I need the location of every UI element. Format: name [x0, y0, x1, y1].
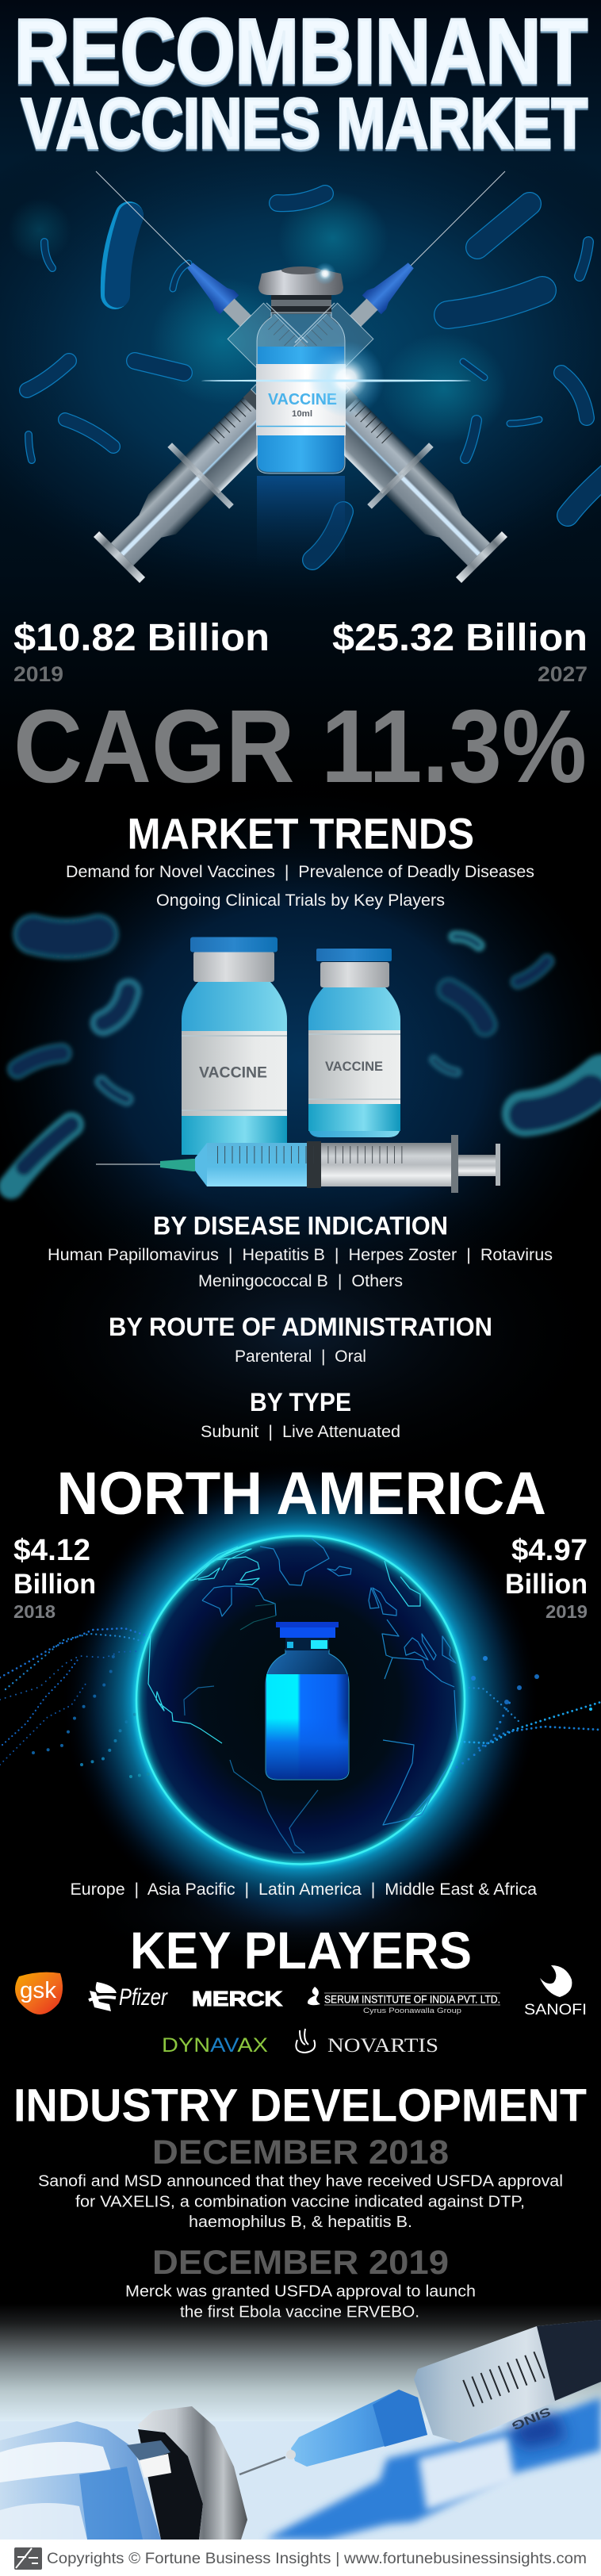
- market size 2019: $10.82 Billion: [13, 617, 270, 659]
- market size 2027: $25.32 Billion: [332, 617, 588, 659]
- horizontal syringe: [96, 1135, 500, 1193]
- regional value 2019: 2019: [545, 1601, 588, 1622]
- vaccine vial: VACCINE: [268, 391, 337, 408]
- logo: serum institute: SERUM INSTITUTE OF INDIA PVT. LTD.: [324, 1992, 500, 2005]
- photo: vial and syringe: [0, 2304, 601, 2540]
- development: december 2018: DECEMBER 2018: [152, 2133, 449, 2172]
- copyright line: Copyrights © Fortune Business Insights | www.fortunebusinessinsights.com: [47, 2551, 587, 2567]
- bacteria around vials: [11, 934, 601, 1186]
- globe glow: [63, 1462, 538, 1938]
- logo: dynavax: DYN AVAX: [162, 2034, 268, 2057]
- logo: serum institute: Cyrus Poonawalla Group: [363, 2007, 461, 2014]
- market size 2019: 2019: [13, 662, 63, 686]
- market size 2019: [13, 617, 270, 686]
- regional value 2018: 2018: [13, 1601, 56, 1622]
- development: december 2018: Sanofi and MSD announced that they have received USFDA approval: [38, 2173, 563, 2191]
- regional value 2018: $4.12: [13, 1534, 90, 1567]
- iceland: [327, 1566, 351, 1576]
- market size 2027: 2027: [538, 662, 588, 686]
- market trends heading: MARKET TRENDS: [127, 809, 474, 858]
- vaccine vial: 10ml: [292, 409, 312, 419]
- development: december 2018: haemophilus B, & hepatitis B.: [189, 2214, 412, 2231]
- segment: by disease indication: [48, 1212, 553, 1290]
- syringe crossing right to left: [86, 140, 536, 591]
- segment: by type: [201, 1388, 400, 1441]
- greenland: [260, 1538, 329, 1585]
- segment: by type: Subunit | Live Attenuated: [201, 1423, 400, 1441]
- western north america: [148, 1632, 222, 1743]
- regional value 2019: $4.97: [511, 1534, 588, 1567]
- segment: by route of administration: BY ROUTE OF ADMINISTRATION: [109, 1313, 492, 1341]
- south america: [230, 1760, 318, 1853]
- segment: by route of administration: [109, 1313, 492, 1366]
- market size 2027: [332, 617, 588, 686]
- small vaccine vial: [308, 949, 400, 1137]
- large vaccine vial: [182, 937, 287, 1155]
- segment: by disease indication: Human Papillomavirus | Hepatitis B | Herpes Zoster | Rotavirus: [48, 1246, 553, 1264]
- north america heading: NORTH AMERICA: [57, 1460, 546, 1528]
- footer logo: [14, 2547, 42, 2570]
- scandinavia: [385, 1561, 420, 1606]
- development: december 2019: Merck was granted USFDA approval to launch: [125, 2283, 476, 2301]
- logo: gsk: gsk: [20, 1978, 56, 2003]
- vaccine vial: [201, 263, 471, 567]
- logo: merck: MERCK: [192, 1987, 282, 2011]
- logo: novartis: [296, 2029, 438, 2057]
- key players heading: KEY PLAYERS: [130, 1921, 472, 1980]
- logo: serum institute: [308, 1987, 500, 2014]
- title: [14, 1, 588, 163]
- british isles: [369, 1588, 396, 1616]
- logo: sanofi: SANOFI: [524, 2002, 587, 2018]
- mediterranean: [404, 1634, 456, 1663]
- regional value 2019: [505, 1534, 588, 1622]
- regional value 2019: Billion: [505, 1569, 588, 1600]
- development: december 2018: [38, 2133, 563, 2231]
- industry development heading: INDUSTRY DEVELOPMENT: [13, 2080, 587, 2132]
- syringe crossing left to right: [65, 140, 515, 591]
- logo: sanofi: [524, 1965, 587, 2018]
- vial inside globe: [266, 1622, 349, 1780]
- logo: pfizer: Pfizer: [119, 1984, 168, 2011]
- particle waves: [0, 1628, 601, 1777]
- footer: [0, 2540, 601, 2576]
- regional value 2018: [13, 1534, 96, 1622]
- small vaccine vial: VACCINE: [325, 1059, 383, 1074]
- development: december 2018: for VAXELIS, a combination vaccine indicated against DTP,: [75, 2194, 525, 2211]
- large vaccine vial: VACCINE: [199, 1064, 267, 1082]
- development: december 2019: [125, 2244, 476, 2321]
- other regions: Europe | Asia Pacific | Latin America | Middle East & Africa: [70, 1880, 537, 1899]
- segment: by disease indication: BY DISEASE INDICATION: [153, 1212, 448, 1240]
- logo: novartis: NOVARTIS: [327, 2035, 438, 2057]
- canada: [202, 1586, 276, 1616]
- market trends list: Demand for Novel Vaccines | Prevalence of Deadly Diseases: [66, 863, 534, 881]
- arctic islands: [190, 1547, 259, 1585]
- segment: by type: BY TYPE: [250, 1388, 351, 1416]
- segment: by route of administration: Parenteral | Oral: [235, 1347, 366, 1366]
- logo: gsk: [15, 1972, 63, 2014]
- western europe: [382, 1620, 454, 1687]
- segment: by disease indication: Meningococcal B | Others: [198, 1272, 403, 1290]
- regional value 2018: Billion: [13, 1569, 96, 1600]
- hudson inlets: [240, 1604, 276, 1630]
- united states: [184, 1686, 214, 1715]
- development: december 2019: DECEMBER 2019: [152, 2244, 449, 2282]
- development: december 2019: the first Ebola vaccine ERVEBO.: [180, 2304, 419, 2321]
- logo: pfizer: [89, 1982, 168, 2011]
- photo: vial and syringe: SING: [510, 2404, 553, 2432]
- hero illustration: bacteria: [27, 194, 601, 560]
- africa: [383, 1690, 457, 1825]
- market trends list: Ongoing Clinical Trials by Key Players: [156, 891, 445, 910]
- globe outline with continents: [136, 1535, 465, 1864]
- market trends list: [66, 863, 534, 910]
